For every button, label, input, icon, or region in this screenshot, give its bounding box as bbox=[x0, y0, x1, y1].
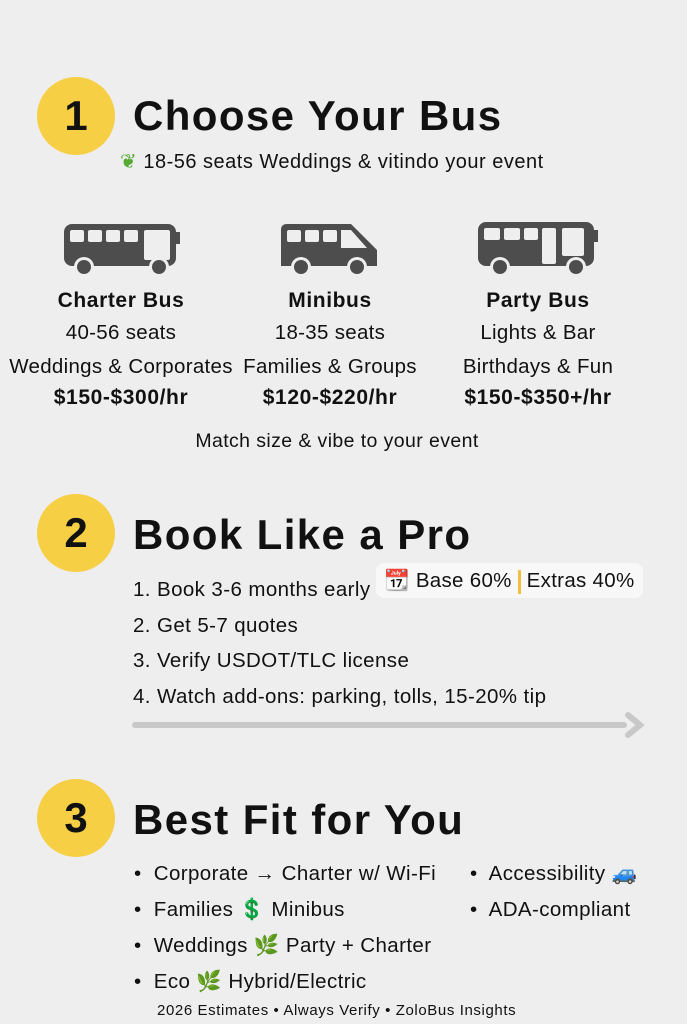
bullets left bbox=[134, 862, 436, 993]
checklist: 4. Watch add-ons: parking, tolls, 15-20% tip bbox=[133, 684, 546, 708]
callout: cost split bbox=[376, 563, 642, 598]
callout: cost split: 📆 Base 60% Extras 40% bbox=[384, 569, 634, 592]
card: charter bus bbox=[9, 289, 233, 409]
card: charter bus: $150-$300/hr bbox=[54, 386, 188, 409]
card: party bus bbox=[463, 289, 613, 409]
bullets left: • Families 💲 Minibus bbox=[134, 898, 345, 921]
card: party bus: $150-$350+/hr bbox=[464, 386, 612, 409]
icon: party bus bbox=[478, 222, 598, 274]
bullets left: • Weddings 🌿 Party + Charter bbox=[134, 934, 431, 957]
note: Match size & vibe to your event bbox=[195, 430, 479, 452]
step 1 badge bbox=[37, 77, 115, 155]
arrow bbox=[132, 712, 644, 738]
heading: best fit: Best Fit for You bbox=[133, 796, 464, 843]
heading: book like a pro: Book Like a Pro bbox=[133, 511, 471, 558]
checklist: 2. Get 5-7 quotes bbox=[133, 614, 298, 636]
card: party bus: Birthdays & Fun bbox=[463, 355, 613, 378]
checklist: 3. Verify USDOT/TLC license bbox=[133, 649, 409, 672]
card: minibus: Minibus bbox=[288, 289, 372, 312]
bullets right bbox=[470, 862, 638, 921]
card: minibus: $120-$220/hr bbox=[263, 386, 397, 409]
checklist: 1. Book 3-6 months early bbox=[133, 578, 370, 601]
icon: minibus bbox=[281, 224, 377, 274]
bullets left: • Corporate → Charter w/ Wi-Fi bbox=[134, 862, 436, 885]
bullets left: • Eco 🌿 Hybrid/Electric bbox=[134, 970, 367, 993]
card: party bus: Party Bus bbox=[486, 289, 590, 312]
footer: 2026 Estimates • Always Verify • ZoloBus Insights bbox=[157, 1002, 516, 1019]
card: minibus: Families & Groups bbox=[243, 355, 417, 378]
step 3 badge: 3 bbox=[64, 794, 88, 841]
bullets right: • ADA-compliant bbox=[470, 898, 631, 921]
step 2 badge bbox=[37, 494, 115, 572]
step 2 badge: 2 bbox=[64, 509, 88, 556]
heading: choose your bus: Choose Your Bus bbox=[133, 92, 502, 139]
checklist bbox=[133, 578, 546, 708]
card: party bus: Lights & Bar bbox=[480, 321, 596, 344]
subtitle: ❦ 18-56 seats Weddings & vitindo your event bbox=[120, 151, 544, 173]
step 3 badge bbox=[37, 779, 115, 857]
card: minibus bbox=[243, 289, 417, 409]
bullets right: • Accessibility 🚙 bbox=[470, 862, 638, 885]
card: minibus: 18-35 seats bbox=[275, 321, 385, 344]
icon: charter bus bbox=[64, 224, 180, 274]
card: charter bus: Charter Bus bbox=[58, 289, 184, 312]
card: charter bus: 40-56 seats bbox=[66, 321, 176, 344]
card: charter bus: Weddings & Corporates bbox=[9, 355, 233, 378]
step 1 badge: 1 bbox=[64, 92, 88, 139]
